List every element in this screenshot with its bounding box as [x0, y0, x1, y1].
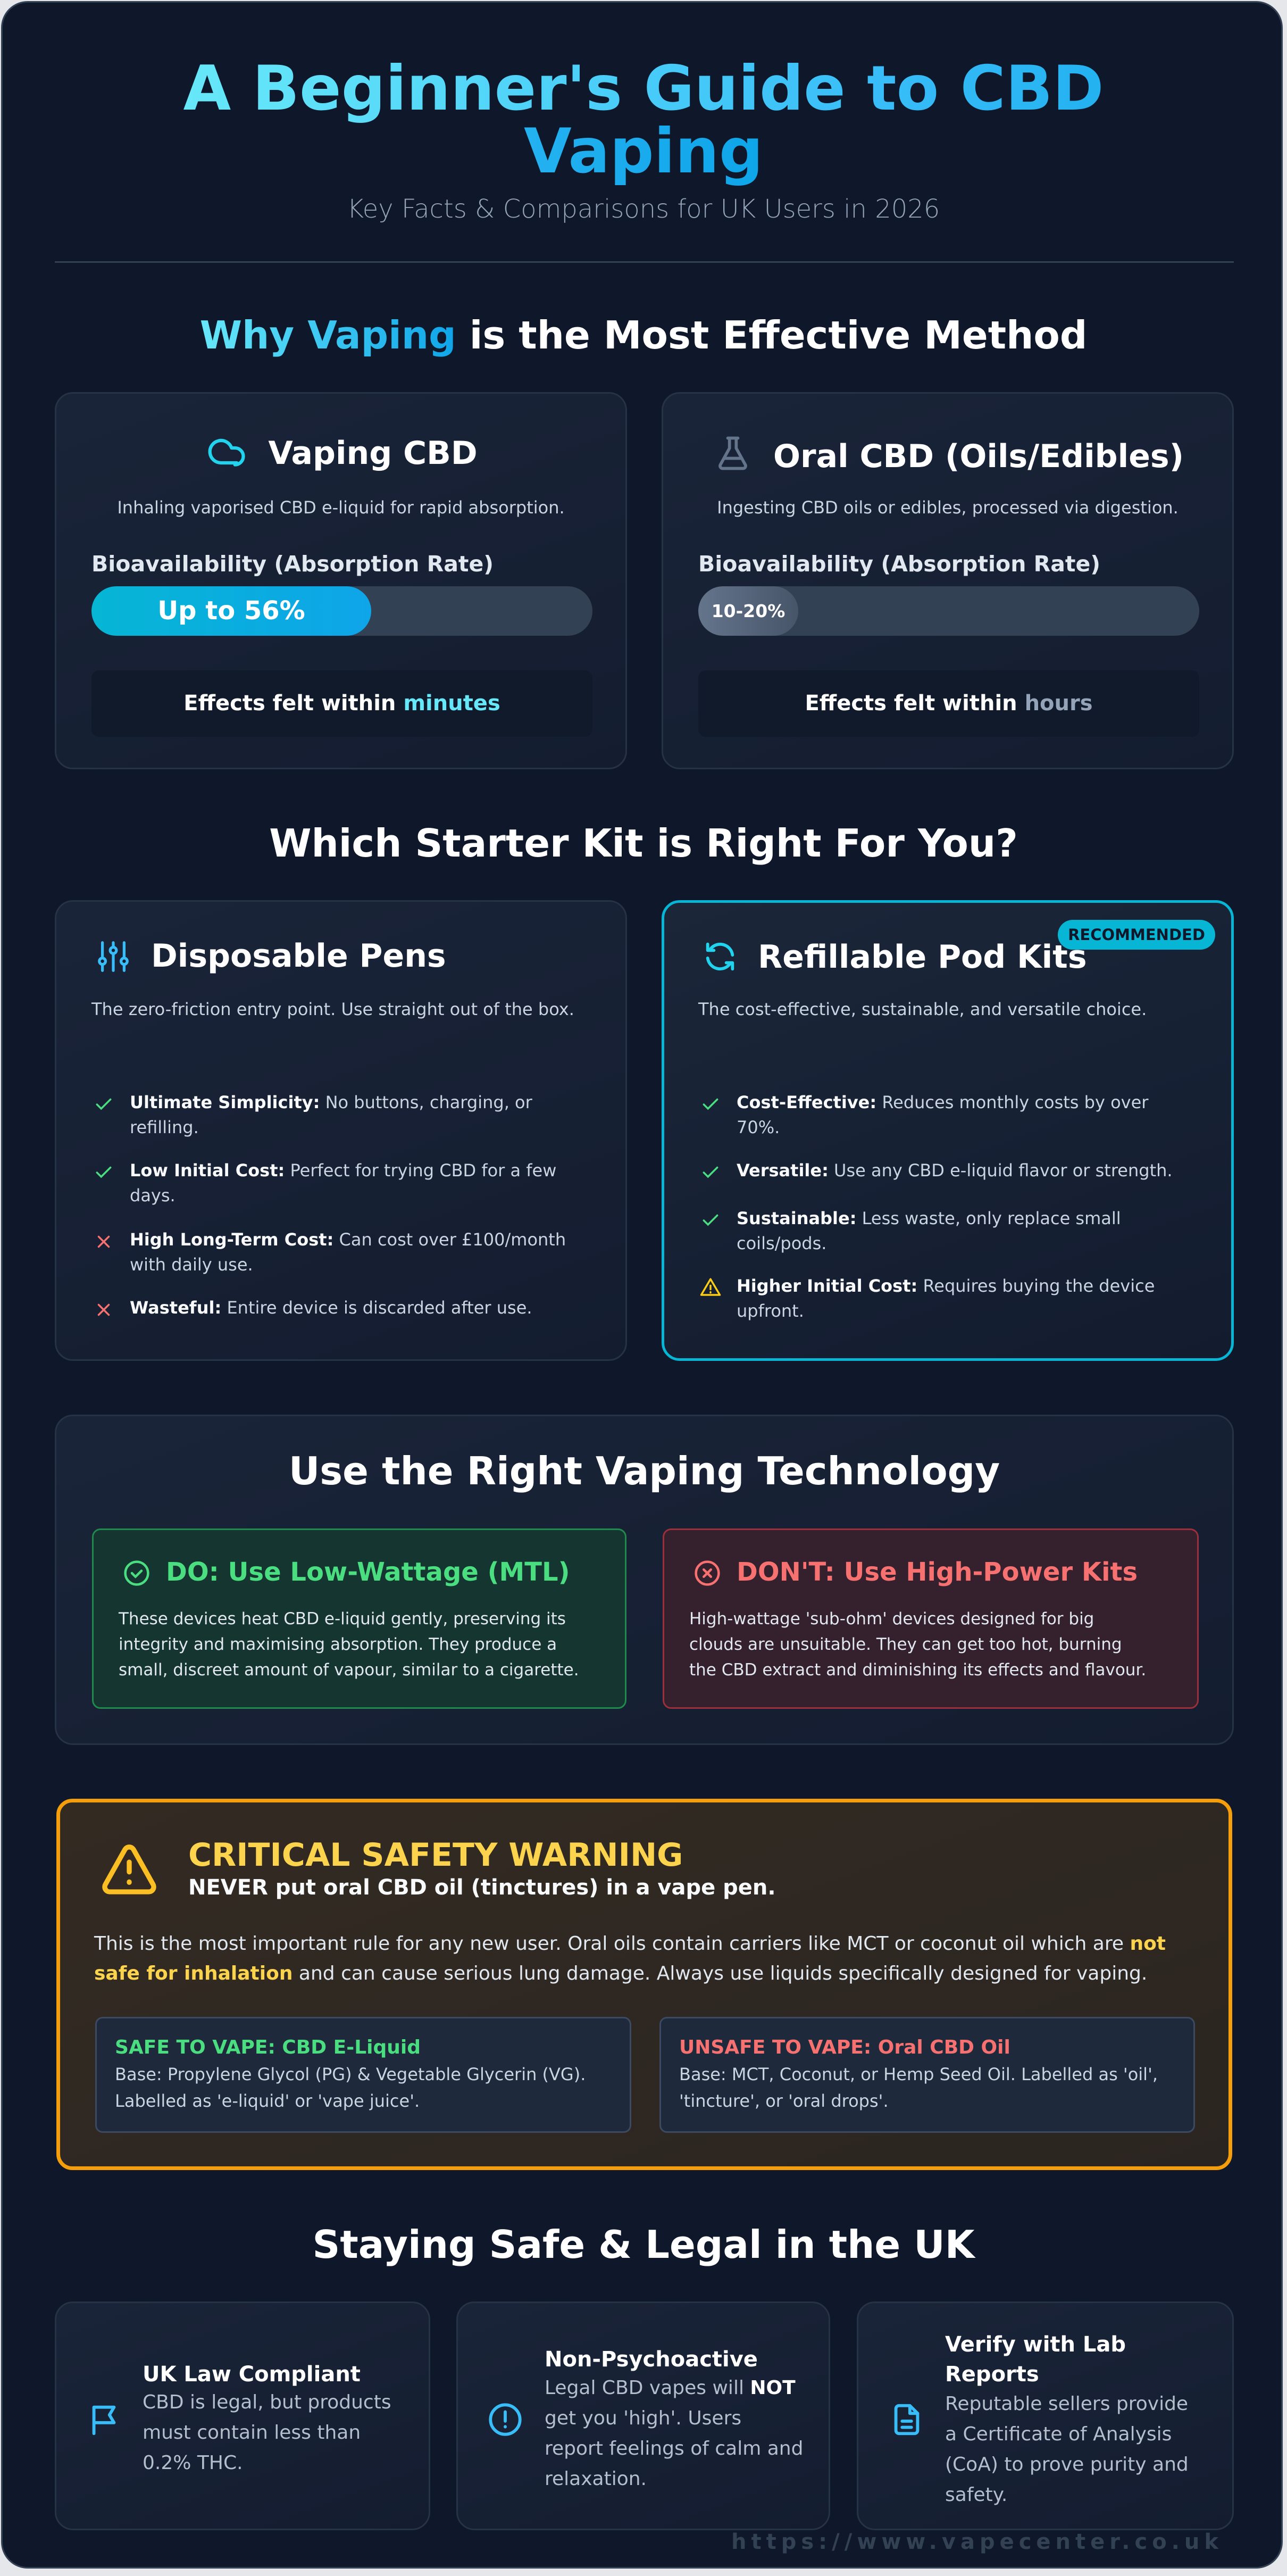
title: DON'T: Use High-Power Kits: [737, 1557, 1138, 1587]
box: unsafe: Base: MCT, Coconut, or Hemp Seed Oil. Labelled as 'oil',: [679, 2064, 1158, 2084]
description: The cost-effective, sustainable, and versatile choice.: [698, 999, 1147, 1019]
list item: pro: [96, 1092, 532, 1137]
icon: warning: [102, 1844, 156, 1894]
heading: starter kit: Which Starter Kit is Right For You?: [269, 821, 1018, 866]
description: The zero-friction entry point. Use straight out of the box.: [91, 999, 574, 1019]
panel: vaping CBD: [55, 392, 627, 769]
list item: warning: Higher Initial Cost: Requires buying the device: [737, 1276, 1155, 1296]
text: [689, 1609, 1146, 1680]
icon: alert circle: [489, 2403, 522, 2436]
box: safe: Base: Propylene Glycol (PG) & Vegetable Glycerin (VG).: [115, 2064, 586, 2084]
card: non-psychoactive: [456, 2301, 830, 2530]
list item: coils/pods.: [737, 1233, 826, 1253]
box: don't: [663, 1528, 1199, 1709]
box: safe: [95, 2017, 631, 2133]
heading: Use the Right Vaping Technology: [289, 1449, 1000, 1493]
list item: pro: Ultimate Simplicity: No buttons, charging, or: [130, 1092, 532, 1112]
list item: con: High Long-Term Cost: Can cost over £100/month: [130, 1229, 566, 1250]
list item: pro: days.: [130, 1185, 176, 1206]
list item: pro: Low Initial Cost: Perfect for trying CBD for a few: [130, 1160, 556, 1181]
panel title: Disposable Pens: [151, 937, 446, 975]
icon: refresh: [706, 943, 734, 970]
panel: vaping technology: [55, 1415, 1234, 1745]
card: lab reports: Reports: [945, 2362, 1039, 2387]
badge: recommended: RECOMMENDED: [1068, 926, 1205, 944]
footer url: https://www.vapecenter.co.uk: [731, 2530, 1223, 2554]
heading: why vaping: Why Vaping is the Most Effective Method: [200, 313, 1087, 358]
callout: critical safety warning: [56, 1799, 1232, 2170]
list item: Versatile: Use any CBD e-liquid flavor or strength.: [737, 1160, 1173, 1181]
card: non-psychoactive: Legal CBD vapes will NOT: [545, 2377, 796, 2399]
paragraph: safe for inhalation and can cause serious lung damage. Always use liquids specifically designed for vaping.: [94, 1963, 1147, 1984]
list item: pro: [96, 1160, 556, 1206]
card: lab reports: a Certificate of Analysis: [945, 2423, 1172, 2445]
card: UK law: UK Law Compliant: [143, 2362, 361, 2387]
card: UK law: CBD is legal, but products: [143, 2391, 391, 2413]
card: non-psychoactive: relaxation.: [545, 2468, 647, 2490]
panel title: vaping: Vaping CBD: [268, 435, 478, 472]
effects callout: [91, 670, 592, 737]
icon: circle x: [695, 1560, 720, 1586]
card: lab reports: (CoA) to prove purity and: [945, 2454, 1189, 2475]
bar chart: 56%: Up to 56%: [157, 596, 305, 626]
title: Vaping: [524, 115, 763, 187]
label: Bioavailability (Absorption Rate): [91, 551, 494, 577]
box: unsafe: UNSAFE TO VAPE: Oral CBD Oil: [679, 2037, 1010, 2058]
list item: [703, 1092, 1149, 1137]
icon: circle check: [124, 1560, 149, 1586]
title: A Beginner's Guide to CBD: [183, 53, 1104, 124]
box: do: [92, 1528, 626, 1709]
description: Inhaling vaporised CBD e-liquid for rapid absorption.: [117, 497, 565, 518]
icon: flag: [93, 2406, 116, 2436]
text: the CBD extract and diminishing its effects and flavour.: [689, 1660, 1146, 1680]
box: safe: SAFE TO VAPE: CBD E-Liquid: [115, 2037, 421, 2058]
list item: con: with daily use.: [130, 1254, 253, 1275]
panel: refillable pod kits: [662, 900, 1234, 1361]
effects callout: Effects felt within hours: [805, 691, 1093, 716]
list item: warning: [700, 1276, 1155, 1321]
list item: Sustainable: Less waste, only replace small: [737, 1208, 1121, 1228]
heading: safe & legal: Staying Safe & Legal in the UK: [312, 2222, 975, 2267]
effects callout: Effects felt within minutes: [183, 691, 500, 716]
badge: recommended: [1058, 920, 1215, 950]
subtitle: NEVER put oral CBD oil (tinctures) in a vape pen.: [188, 1875, 776, 1900]
list item: [703, 1208, 1121, 1253]
panel title: Refillable Pod Kits: [758, 938, 1087, 976]
bar chart: 10-20%: [698, 586, 1199, 636]
card: UK law: [55, 2301, 430, 2530]
bar chart: 10-20%: 10-20%: [712, 601, 785, 621]
list item: con: [98, 1229, 566, 1275]
icon: cloud: [208, 438, 245, 467]
list item: Cost-Effective: Reduces monthly costs by over: [737, 1092, 1148, 1112]
text: integrity and maximising absorption. They produce a: [119, 1635, 557, 1654]
panel: disposable pens: [55, 900, 627, 1361]
panel title: oral: Oral CBD (Oils/Edibles): [773, 438, 1184, 475]
text: High-wattage 'sub-ohm' devices designed for big: [689, 1609, 1094, 1628]
title: CRITICAL SAFETY WARNING: [188, 1837, 683, 1874]
card: UK law: 0.2% THC.: [143, 2452, 243, 2474]
list item: con: Wasteful: Entire device is discarded after use.: [130, 1298, 532, 1318]
text: clouds are unsuitable. They can get too hot, burning: [689, 1635, 1122, 1654]
label: Bioavailability (Absorption Rate): [698, 551, 1100, 577]
bar chart: 56%: [91, 586, 592, 636]
title: [183, 53, 1104, 187]
panel: oral CBD: [662, 392, 1234, 769]
card: lab reports: Reputable sellers provide: [945, 2393, 1188, 2415]
paragraph: [94, 1933, 1166, 1984]
subtitle: Key Facts & Comparisons for UK Users in 2026: [347, 194, 940, 224]
card: non-psychoactive: get you 'high'. Users: [545, 2407, 741, 2429]
list item: pro: refilling.: [130, 1117, 199, 1137]
effects callout: [698, 670, 1199, 737]
paragraph: This is the most important rule for any new user. Oral oils contain carriers like MCT or coconut oil which are not: [94, 1933, 1166, 1955]
card: lab reports: safety.: [945, 2484, 1007, 2506]
card: lab reports: [857, 2301, 1234, 2530]
box: safe: Labelled as 'e-liquid' or 'vape juice'.: [115, 2091, 420, 2111]
box: unsafe: 'tincture', or 'oral drops'.: [679, 2091, 889, 2111]
card: non-psychoactive: report feelings of calm and: [545, 2438, 803, 2459]
description: Ingesting CBD oils or edibles, processed via digestion.: [717, 497, 1179, 518]
card: lab reports: Verify with Lab: [945, 2332, 1126, 2357]
icon: document: [895, 2404, 919, 2436]
box: unsafe: [659, 2017, 1195, 2133]
title: DO: Use Low-Wattage (MTL): [166, 1557, 570, 1587]
text: small, discreet amount of vapour, similar to a cigarette.: [119, 1660, 579, 1680]
card: UK law: must contain less than: [143, 2422, 361, 2444]
list item: warning: upfront.: [737, 1301, 804, 1321]
card: non-psychoactive: Non-Psychoactive: [545, 2347, 758, 2372]
text: These devices heat CBD e-liquid gently, preserving its: [119, 1609, 566, 1628]
text: [118, 1609, 579, 1680]
icon: flask: [718, 436, 747, 470]
list item: 70%.: [737, 1117, 780, 1137]
icon: sliders: [98, 941, 129, 972]
